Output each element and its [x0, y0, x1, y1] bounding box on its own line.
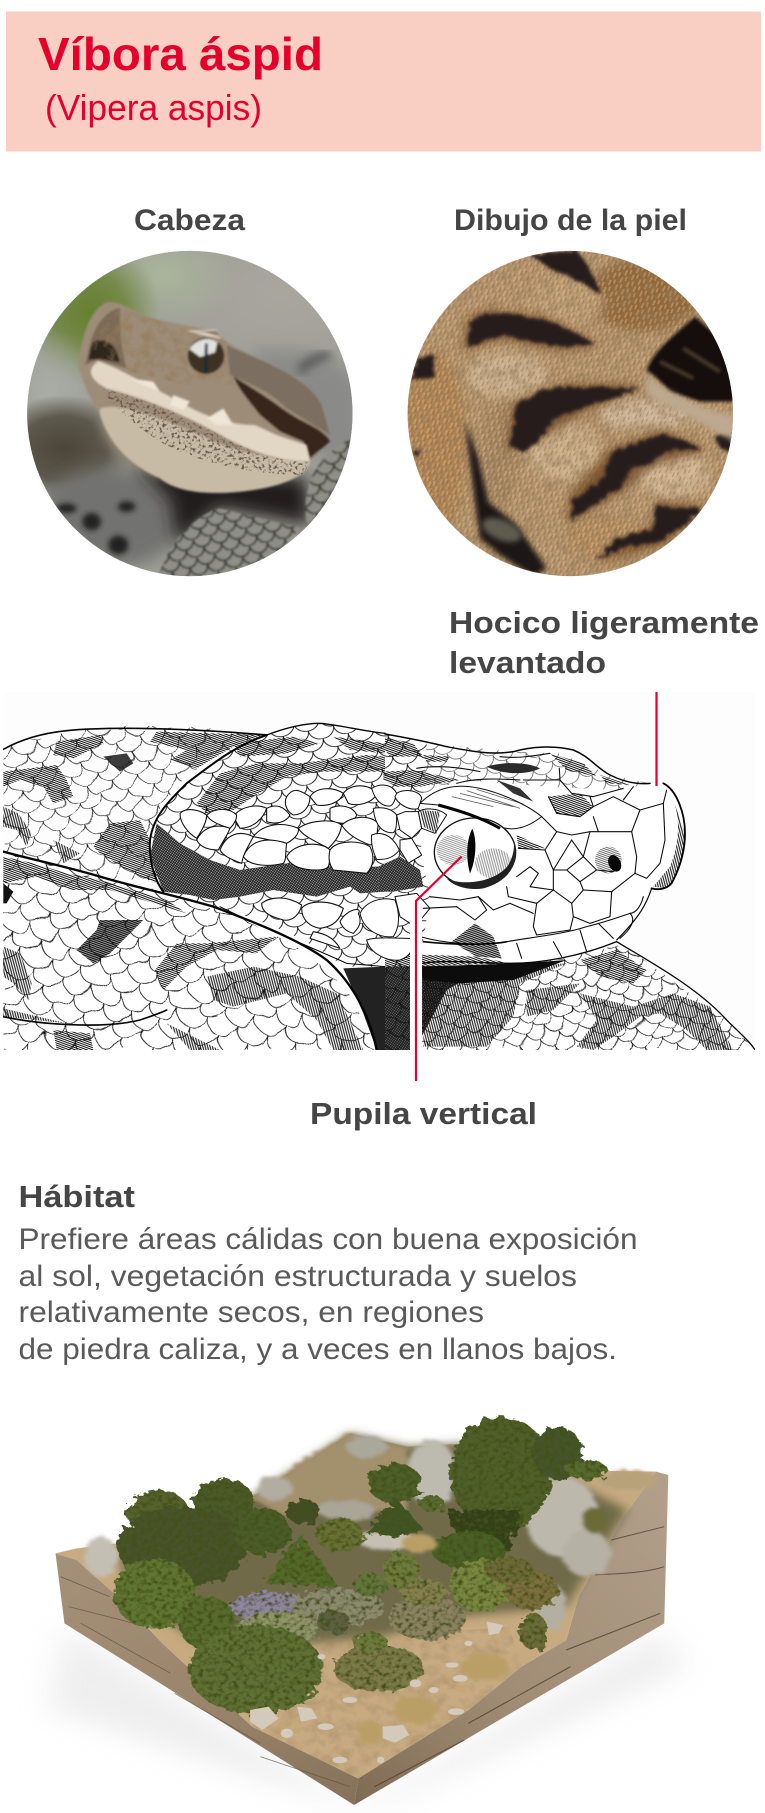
- label: head photo: Cabeza: [134, 204, 245, 237]
- label: skin pattern photo: Dibujo de la piel: [454, 204, 687, 237]
- stones and dry grass: [250, 1533, 509, 1763]
- habitat description: de piedra caliza, y a veces en llanos bajos.: [18, 1333, 617, 1366]
- label: vertical pupil: Pupila vertical: [310, 1096, 537, 1131]
- label: raised snout: Hocico ligeramente: [449, 605, 759, 640]
- leader line: pupil: [410, 856, 462, 1081]
- hill and rocks: [85, 1433, 656, 1630]
- trees and shrubs: [113, 1417, 607, 1715]
- left cut face: [56, 1553, 358, 1805]
- nostril: [595, 847, 624, 874]
- habitat description: Prefiere áreas cálidas con buena exposición: [18, 1223, 638, 1256]
- habitat description: relativamente secos, en regiones: [18, 1296, 484, 1329]
- photo: viper head in circle: [27, 250, 352, 576]
- leader line: snout: [655, 692, 658, 786]
- photo: skin pattern in circle: [400, 245, 743, 585]
- label: raised snout: [449, 605, 759, 680]
- header band: [6, 12, 761, 152]
- label: raised snout: levantado: [449, 645, 606, 680]
- right cut face: [354, 1472, 668, 1805]
- ground surface: [56, 1433, 656, 1778]
- eye: [434, 818, 516, 889]
- habitat heading: Hábitat: [18, 1179, 135, 1214]
- illustration: ink drawing of viper: [3, 692, 765, 1050]
- terrain block illustration: [48, 1417, 685, 1813]
- scientific name: (Vipera aspis): [45, 87, 262, 128]
- habitat description: [18, 1223, 638, 1366]
- title: Víbora áspid: [38, 28, 323, 80]
- habitat description: al sol, vegetación estructurada y suelos: [18, 1260, 577, 1293]
